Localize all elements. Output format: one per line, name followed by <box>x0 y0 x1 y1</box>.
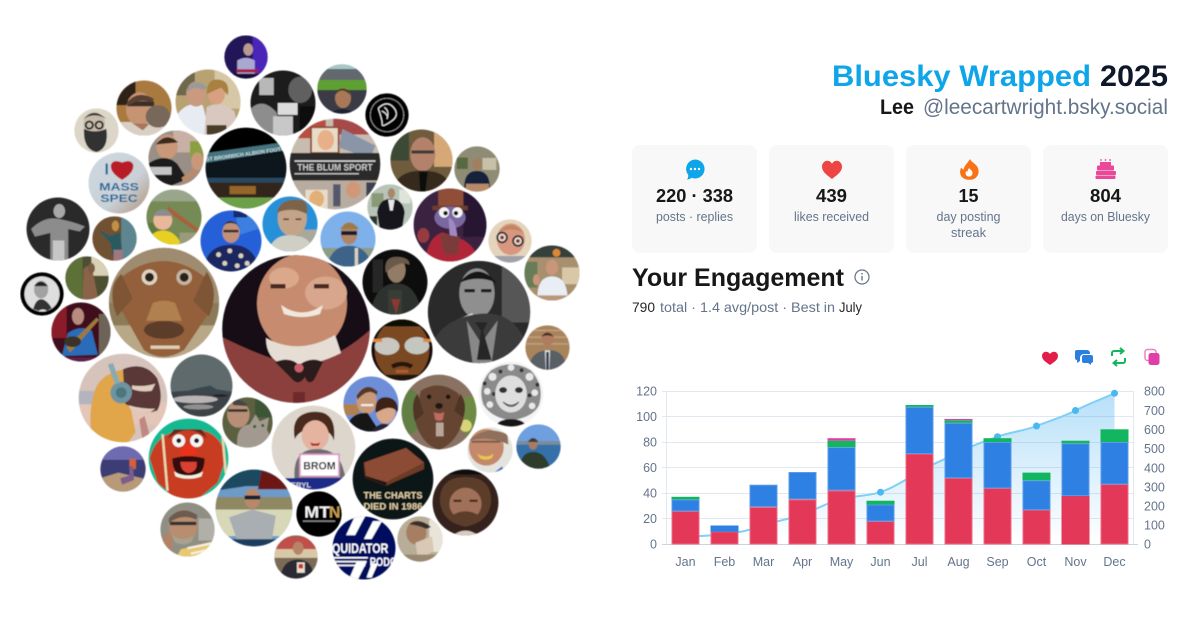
avatar: man holding a book in a shop <box>274 534 318 580</box>
avatar: speaker on stage <box>224 35 268 80</box>
avatar: couple on sofa <box>174 68 241 136</box>
avatar: Animal muppet <box>148 418 230 500</box>
avatar: I love Mass Spec badge: SPEC <box>100 193 138 205</box>
engagement summary: 790 <box>632 299 655 315</box>
avatar: MTN logo <box>296 490 342 538</box>
stat label: likes received <box>794 209 869 224</box>
avatar: stadium at night: WEST BROMWICH ALBION FOOTBALL <box>197 145 296 164</box>
avatar: man at football ground <box>316 64 368 115</box>
left axis labels: 100 <box>636 410 657 424</box>
avatar: laughing man in ruff collar <box>221 254 371 404</box>
right axis labels: 500 <box>1144 442 1165 456</box>
month labels: Feb <box>714 555 735 569</box>
avatar: The Charts Died in 1986 coffin logo <box>352 438 434 520</box>
stat label <box>936 209 1000 240</box>
left axis labels: 0 <box>650 538 657 552</box>
avatar: smiling couple selfie <box>342 376 400 432</box>
engagement summary: July <box>839 299 862 315</box>
avatar: man in profile <box>396 516 444 562</box>
icon: flame <box>960 159 979 180</box>
month labels: Jul <box>912 555 927 569</box>
stacked bars: quotes <box>828 419 972 441</box>
panel: posts and replies <box>632 145 757 253</box>
avatar: I love Mass Spec badge <box>88 152 150 214</box>
avatar: cartoon character in headphones <box>78 353 168 444</box>
right axis labels: 600 <box>1144 423 1165 437</box>
avatar: black and white scene <box>250 70 316 136</box>
avatar: man in cap and yellow shirt <box>146 188 202 246</box>
cumulative line <box>686 393 1114 537</box>
avatar: The Charts Died in 1986 coffin logo: DIED IN 1986 <box>363 500 423 511</box>
avatar: man with cat <box>116 80 172 136</box>
avatar: person dancing <box>92 216 138 262</box>
icon: quotes legend <box>1145 350 1160 365</box>
right axis labels: 400 <box>1144 462 1165 476</box>
icon: birthday cake <box>1096 159 1116 179</box>
stat label: posts · replies <box>656 209 733 224</box>
avatar: mirrored sunglasses with moustache <box>370 318 434 382</box>
avatar: man in grey suit <box>524 324 570 370</box>
chart: monthly engagement <box>636 384 1165 569</box>
avatar: woman with BROM sign: BROM <box>303 461 336 473</box>
avatar: man in floral shirt <box>200 210 262 272</box>
avatar: man in sunglasses and cap <box>320 210 376 268</box>
icon: heart legend <box>1042 352 1058 365</box>
stat value: 439 <box>816 186 847 206</box>
title: Bluesky Wrapped <box>832 60 1091 93</box>
left axis labels <box>636 384 657 552</box>
avatar: Gonzo in top hat <box>412 188 488 262</box>
stat value: 804 <box>1090 186 1121 206</box>
avatar: man waving <box>148 130 204 186</box>
stat label: day posting <box>936 209 1000 224</box>
left axis labels: 20 <box>643 512 657 526</box>
panel: days on Bluesky <box>1043 145 1168 253</box>
avatar: guitarist on stage <box>50 302 112 362</box>
avatar: Quidator podcast logo <box>332 516 396 580</box>
avatar: bearded man in glasses <box>74 108 119 153</box>
right axis labels: 300 <box>1144 480 1165 494</box>
stacked bars: likes <box>672 454 1128 544</box>
left axis labels: 40 <box>643 486 657 500</box>
avatar: black-ringed monochrome face <box>20 272 64 316</box>
avatar: laughing man in glasses <box>467 427 513 473</box>
avatar: small figure on sand <box>100 446 146 492</box>
stacked bars: replies <box>672 407 1128 531</box>
avatar: grey sea and headland <box>170 354 234 418</box>
avatar: man on promenade <box>214 468 294 548</box>
gridlines <box>662 391 1138 544</box>
month labels: Nov <box>1064 555 1087 569</box>
engagement summary: total · 1.4 avg/post · Best in <box>660 299 835 315</box>
month labels: Dec <box>1103 555 1126 569</box>
avatar: The Blum Sport collage: THE BLUM SPORT <box>297 162 373 172</box>
avatar: man in suit on chair <box>366 184 414 230</box>
avatar: shaggy brown dog <box>400 374 478 450</box>
month labels: May <box>830 555 854 569</box>
chart legend icons <box>1042 348 1160 366</box>
avatar: vintage comedian photo <box>26 196 90 261</box>
avatar: black and white caricature of a woman <box>479 362 543 428</box>
panel: day posting streak <box>906 145 1031 253</box>
cumulative points <box>877 390 1118 496</box>
avatar: MTN logo: MT <box>304 505 331 522</box>
avatar: stadium at night <box>204 126 288 210</box>
month labels: Mar <box>753 555 774 569</box>
heading: Your Engagement: Your Engagement <box>632 264 845 292</box>
month labels: Apr <box>793 555 812 569</box>
avatar: The Charts Died in 1986 coffin logo: THE CHARTS <box>363 490 423 501</box>
avatar: man and cat <box>222 396 274 448</box>
avatar: dog close-up <box>108 247 220 359</box>
avatar: baby with round glasses <box>488 219 532 264</box>
bubble cluster of avatars <box>20 35 580 580</box>
icon: speech bubble <box>686 159 705 180</box>
month labels <box>675 555 1126 569</box>
avatar: MTN logo: N <box>329 505 340 522</box>
right axis labels: 200 <box>1144 500 1165 514</box>
avatar: I love Mass Spec badge: MASS <box>99 181 139 193</box>
stat label: days on Bluesky <box>1061 209 1150 224</box>
stat label: streak <box>951 225 986 240</box>
avatar: black circular logo <box>364 92 410 138</box>
avatar: woman with BROM sign <box>271 405 356 490</box>
avatar: man at restaurant <box>524 244 580 302</box>
right axis labels: 800 <box>1144 384 1165 398</box>
icon: replies legend <box>1075 350 1093 365</box>
avatar: man with hand on cheek <box>160 502 216 558</box>
left axis labels: 120 <box>636 384 657 398</box>
right axis labels <box>1144 384 1165 552</box>
icon: reposts legend <box>1112 348 1125 366</box>
avatar: close-up man <box>262 196 318 252</box>
avatar: The Blum Sport collage <box>288 118 382 210</box>
title: 2025 <box>1100 60 1168 93</box>
avatar: bald man in glasses <box>390 128 454 192</box>
right axis labels: 700 <box>1144 404 1165 418</box>
month labels: Aug <box>947 555 970 569</box>
avatar: Humphrey Bogart black and white <box>427 260 532 364</box>
right axis labels: 100 <box>1144 518 1165 532</box>
user name and handle: @leecartwright.bsky.social <box>923 96 1168 119</box>
avatar: animal in greenery <box>64 256 110 300</box>
month labels: Jun <box>870 555 891 569</box>
avatar: man by blue lake <box>516 424 562 470</box>
month labels: Jan <box>675 555 696 569</box>
avatar: I love Mass Spec badge: I <box>104 161 109 178</box>
month labels: Sep <box>986 555 1009 569</box>
avatar: man in navy shirt <box>454 146 500 192</box>
user name and handle: Lee <box>880 96 914 119</box>
stat value: 220 · 338 <box>656 186 733 206</box>
stat value: 15 <box>958 186 978 206</box>
avatar: dark portrait of young man <box>362 248 428 316</box>
avatar: shaggy bearded man <box>432 468 500 536</box>
left axis labels: 80 <box>643 436 657 450</box>
left axis labels: 60 <box>643 461 657 475</box>
avatar: woman with BROM sign: BERYL <box>285 480 311 489</box>
icon: info <box>855 270 869 284</box>
month labels: Oct <box>1027 555 1047 569</box>
panel: likes received <box>769 145 894 253</box>
icon: heart <box>822 161 842 179</box>
right axis labels: 0 <box>1144 538 1151 552</box>
stacked bars: reposts <box>672 405 1128 504</box>
cumulative area <box>686 393 1114 544</box>
